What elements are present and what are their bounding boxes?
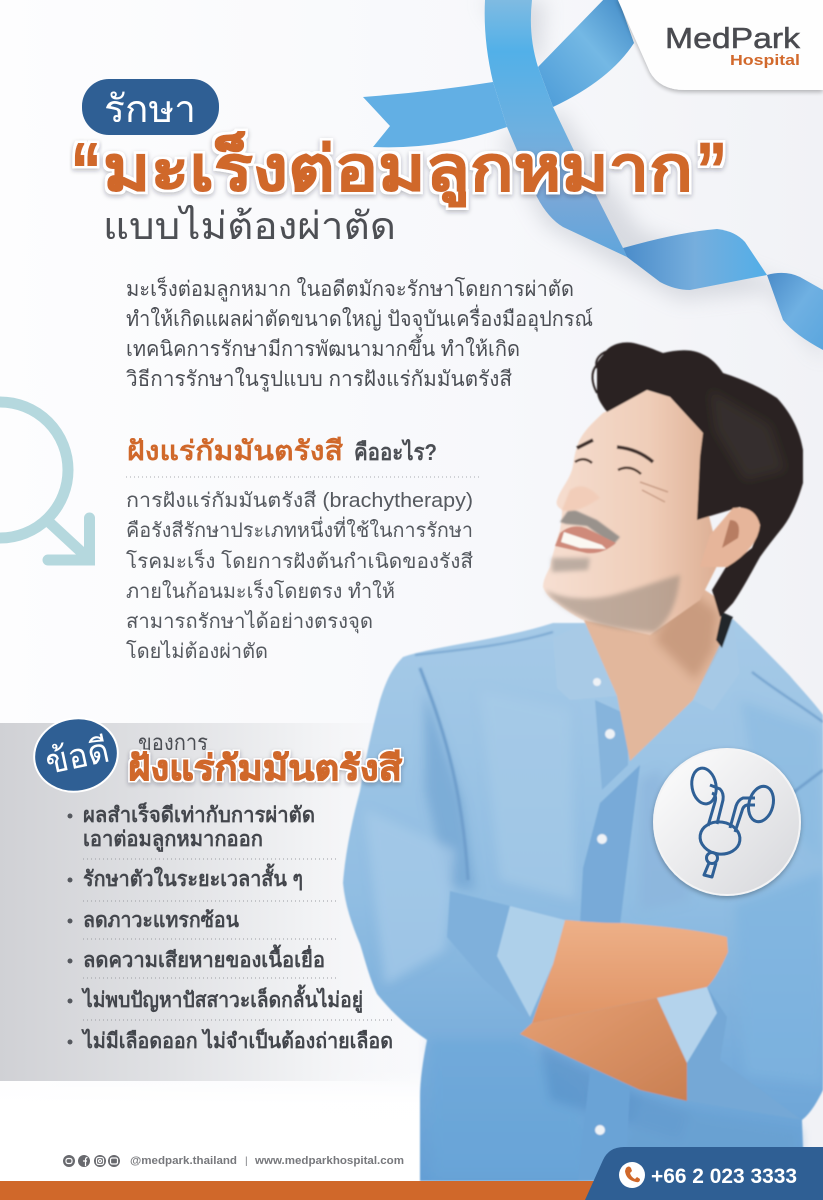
brachytherapy heading [127,436,437,466]
brows and eyes [577,440,653,462]
intro paragraph: เทคนิคการรักษามีการพัฒนามากขึ้น ทำให้เกิด [126,334,520,361]
main title: มะเร็งต่อมลูกหมาก [103,131,693,207]
shirt seams [415,632,823,880]
benefits list: ลดภาวะแทรกซ้อน [83,908,240,932]
social handles: www.medparkhospital.com [254,1155,404,1167]
intro paragraph [126,275,593,392]
brachytherapy description: โรคมะเร็ง โดยการฝังต้นกำเนิดของรังสี [126,548,473,573]
benefits list: ไม่มีเลือดออก ไม่จำเป็นต้องถ่ายเลือด [81,1027,393,1053]
urinary system icon [654,749,800,895]
phone box: +66 2 023 3333 [651,1165,797,1188]
buttons [593,678,615,1135]
benefits list: รักษาตัวในระยะเวลาสั้น ๆ [83,863,303,891]
social handles: @medpark.thailand [130,1155,237,1167]
intro paragraph: มะเร็งต่อมลูกหมาก ในอดีตมักจะรักษาโดยการผ่าตัด [126,275,574,302]
benefits list [68,801,393,1053]
shirt placket [580,765,640,925]
brachytherapy heading: ฝังแร่กัมมันตรังสี [127,436,344,466]
benefits list: ผลสำเร็จดีเท่ากับการผ่าตัด [83,801,315,827]
right cuff [657,987,717,1063]
ribbon [363,0,823,350]
benefits panel background [0,723,410,1081]
social handles [63,1155,404,1167]
main title [71,126,727,214]
intro paragraph: วิธีการรักษาในรูปแบบ การฝังแร่กัมมันตรังสี [126,367,512,392]
phone icon [625,1166,640,1182]
benefits badge [28,712,124,798]
main title: “ [71,126,101,214]
benefits badge: ข้อดี [42,732,113,782]
collars [553,623,617,700]
brachytherapy heading: คืออะไร? [354,438,437,465]
benefits heading: ฝังแร่กัมมันตรังสี [128,749,403,788]
benefits heading [128,730,403,788]
orange footer bar [0,1181,600,1200]
logo panel: Hospital [730,52,800,69]
hair [592,343,803,617]
brachytherapy description: ภายในก้อนมะเร็งโดยตรง ทำให้ [126,578,395,603]
benefits list: ไม่พบปัญหาปัสสาวะเล็ดกลั้นไม่อยู่ [81,984,363,1014]
brachytherapy description: โดยไม่ต้องผ่าตัด [126,640,268,663]
brachytherapy description: การฝังแร่กัมมันตรังสี (brachytherapy) [126,490,473,512]
intro paragraph: ทำให้เกิดแผลผ่าตัดขนาดใหญ่ ปัจจุบันเครื่องมืออุปกรณ์ [126,304,593,332]
subtitle: แบบไม่ต้องผ่าตัด [103,205,396,248]
forearm upper [532,920,728,1023]
ear [700,508,760,567]
social handles: | [245,1156,248,1167]
moustache [560,508,620,545]
benefits heading: ของการ [138,730,208,755]
logo panel [617,0,823,90]
left cuff [447,891,530,1021]
shirt shading [365,690,823,1180]
decorative circle and arrow [0,402,90,560]
ribbon shadow [480,0,823,360]
brachytherapy description [126,490,473,663]
title badge: รักษา [104,89,196,131]
logo wordmark: MedPark [665,23,801,55]
face [543,390,720,635]
stubble [545,575,680,632]
forearm lower [520,998,687,1101]
benefits list: เอาต่อมลูกหมากออก [83,828,263,853]
benefits list: ลดความเสียหายของเนื้อเยื่อ [83,944,325,972]
phone box [585,1147,823,1200]
man photo illustration [343,343,823,1181]
neck [583,560,722,761]
title badge [82,79,219,135]
brachytherapy description: สามารถรักษาได้อย่างตรงจุด [126,610,373,634]
mouth [555,526,616,553]
nose shading [562,486,600,511]
brachytherapy description: คือรังสีรักษาประเภทหนึ่งที่ใช้ในการรักษา [126,516,473,542]
shirt [343,619,823,1181]
main title: ” [696,126,727,214]
